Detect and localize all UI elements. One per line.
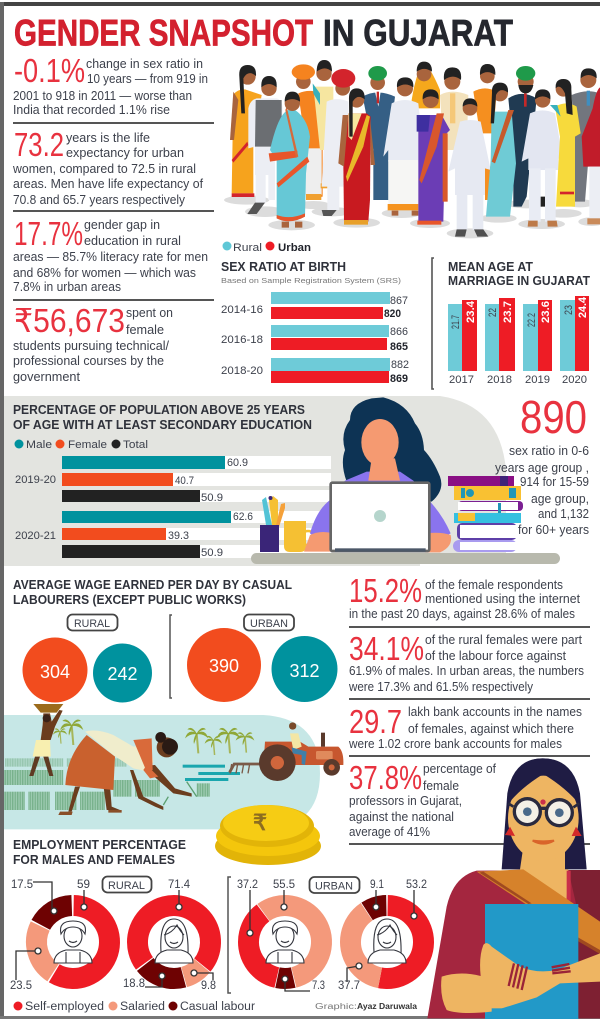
stat: bank accounts: were 1.02 crore bank accounts for males — [348, 737, 562, 751]
wage circle: rural female: 304 — [40, 662, 70, 682]
chart: sex ratio at birth: 867 — [390, 295, 408, 307]
stat: internet use: in the past 20 days, against 28.6% of males — [349, 607, 575, 621]
donut: urban male: 55.5 — [273, 879, 295, 891]
chart: mean age at marriage: 23.4 — [465, 300, 477, 323]
label: urban pill: URBAN — [250, 618, 288, 630]
chart: sex ratio at birth: SEX RATIO AT BIRTH — [221, 259, 346, 274]
label: rural pill: RURAL — [74, 618, 110, 630]
bar chart: education by year: 50.9 — [201, 492, 223, 504]
donut: rural female: 18.8 — [123, 978, 145, 990]
chart: sex ratio at birth: 869 — [390, 373, 408, 385]
donut: rural female: 71.4 — [168, 879, 191, 891]
credit: Graphic: — [315, 1002, 357, 1011]
stat: bank accounts: lakh bank accounts in the names — [408, 705, 582, 719]
wage circle: urban female: 390 — [209, 656, 239, 676]
chart: sex ratio at birth — [221, 259, 409, 385]
donut: rural male: 17.5 — [11, 879, 33, 891]
chart: mean age at marriage: 24.4 — [577, 296, 589, 318]
stat: internet use: 15.2% — [349, 572, 422, 609]
legend: rural urban — [222, 242, 311, 254]
panel: average wage — [13, 577, 338, 702]
stat: sex ratio change: 2001 to 918 in 2011 — worse than — [13, 89, 192, 103]
illustration: stack of books — [448, 476, 523, 552]
stat: education gender gap: 17.7% — [14, 215, 83, 252]
stat: bank accounts: of females, against which there — [408, 722, 574, 736]
stat: female professors: against the national — [349, 810, 454, 824]
stat: internet use — [349, 572, 581, 621]
figure: woman planting rice — [58, 731, 197, 815]
heading: secondary education — [13, 402, 312, 432]
stat: labour force: were 17.3% and 61.5% respectively — [348, 680, 534, 694]
legend: employment types: Casual labour — [180, 1001, 255, 1013]
stat: life expectancy: areas. Men have life expectancy of — [13, 177, 204, 191]
stat: female professors: professors in Gujarat, — [349, 794, 462, 808]
heading: secondary education: PERCENTAGE OF POPULATION ABOVE 25 YEARS — [13, 402, 305, 417]
stat: child sex ratio 890 — [495, 391, 589, 537]
chart: sex ratio at birth: 865 — [390, 341, 408, 353]
wage circle: urban female — [187, 628, 261, 702]
stat: female professors — [349, 759, 496, 839]
stat: education gender gap: education in rural — [84, 234, 181, 248]
legend: rural urban: Rural — [233, 242, 262, 254]
chart: mean age at marriage: 2020 — [562, 374, 587, 386]
stat: female professors: percentage of — [423, 762, 496, 776]
legend: employment types: Self-employed — [25, 1001, 104, 1013]
stat: female professors: average of 41% — [349, 825, 430, 839]
legend: male female total: Male — [26, 439, 52, 451]
chart: mean age at marriage: MEAN AGE AT — [448, 259, 533, 274]
legend: employment types — [14, 1001, 255, 1013]
stat: child sex ratio 890: 914 for 15-59 — [520, 475, 589, 489]
stat: education gender gap: and 68% for women — which was — [13, 266, 196, 280]
bar chart: education by year: 62.6 — [233, 511, 253, 523]
stat: labour force: 34.1% — [349, 630, 424, 667]
donut: urban female: 53.2 — [406, 879, 427, 891]
stat: sex ratio change: 10 years — from 919 in — [87, 72, 208, 86]
illustration: crowd of people — [224, 60, 600, 238]
stat: child sex ratio 890: years age group , — [495, 461, 589, 475]
chart: mean age at marriage: MARRIAGE IN GUJARAT — [448, 273, 590, 288]
wage circle: urban male — [272, 636, 338, 702]
stat: sex ratio change: change in sex ratio in — [86, 57, 203, 71]
donut: rural female — [123, 879, 225, 993]
chart: sex ratio at birth: 2018-20 — [221, 365, 263, 377]
chart: sex ratio at birth: 2016-18 — [221, 334, 263, 346]
stat: sex ratio change — [13, 52, 208, 117]
chart: mean age at marriage: 2017 — [449, 374, 474, 386]
stat: spending on female students: female — [126, 323, 164, 337]
stat: internet use: of the female respondents — [425, 578, 563, 592]
illustration: shelf — [251, 553, 560, 564]
chart: mean age at marriage: 23 — [563, 305, 575, 315]
title: GENDER SNAPSHOT — [14, 12, 313, 54]
stat: spending on female students: spent on — [126, 306, 173, 320]
chart: sex ratio at birth: 2014-16 — [221, 304, 263, 316]
wage circle: rural male — [93, 644, 152, 702]
stat: education gender gap: 7.8% in urban areas — [13, 280, 121, 294]
bar chart: education by year: 50.9 — [201, 547, 223, 559]
stat: education gender gap — [13, 215, 208, 294]
bar chart: education by year: 39.3 — [168, 530, 189, 542]
figure: tractor and driver — [228, 722, 343, 781]
bar chart: education by year: 40.7 — [175, 475, 194, 487]
icon: pencil cup — [260, 496, 285, 552]
stat: bank accounts — [348, 703, 582, 751]
bar chart: education by year: 60.9 — [227, 457, 248, 469]
donut: urban male: 7.3 — [312, 980, 325, 992]
stat: child sex ratio 890: sex ratio in 0-6 — [509, 444, 589, 458]
donut: urban female — [337, 879, 437, 992]
chart: mean age at marriage: 2019 — [525, 374, 550, 386]
chart: mean age at marriage — [448, 259, 590, 386]
panel: average wage: AVERAGE WAGE EARNED PER DAY BY CASUAL — [13, 577, 292, 592]
icon: rupee coins: ₹ — [253, 810, 267, 835]
wage circle: rural female — [22, 638, 88, 702]
wage circle: rural male: 242 — [107, 664, 138, 684]
label: rural pill — [68, 614, 118, 630]
label: urban pill: URBAN — [315, 880, 353, 892]
stat: spending on female students: students pursuing technical/ — [13, 339, 170, 353]
illustration: woman with laptop — [304, 397, 451, 552]
stat: life expectancy — [12, 126, 204, 207]
legend: employment types: Salaried — [120, 1001, 165, 1013]
stat: sex ratio change: -0.1% — [14, 52, 85, 89]
stat: life expectancy: years is the life — [66, 131, 150, 145]
stat: child sex ratio 890: and 1,132 — [538, 507, 589, 521]
stat: bank accounts: 29.7 — [349, 703, 402, 740]
donut: urban female: 37.7 — [338, 980, 360, 992]
stat: education gender gap: areas — 85.7% literacy rate for men — [13, 250, 208, 264]
stat: spending on female students: government — [13, 370, 81, 384]
label: urban pill — [310, 877, 360, 893]
panel: average wage: LABOURERS (EXCEPT PUBLIC WORKS) — [13, 592, 246, 607]
back row people — [292, 60, 600, 216]
wage circle: urban male: 312 — [289, 661, 320, 681]
legend: rural urban: Urban — [278, 242, 311, 254]
chart: sex ratio at birth: 866 — [390, 326, 408, 338]
chart: sex ratio at birth: 820 — [384, 308, 401, 320]
chart: sex ratio at birth: 882 — [391, 359, 409, 371]
chart: mean age at marriage: 2018 — [487, 374, 512, 386]
bar chart: education by year: 2019-20 — [15, 474, 56, 486]
icon: rupee coins — [215, 805, 321, 865]
stat: labour force: 61.9% of males. In urban areas, the numbers — [349, 664, 584, 678]
chart: mean age at marriage: 23.7 — [502, 301, 514, 323]
donut: rural male: 23.5 — [10, 980, 32, 992]
stat: labour force: of the labour force against — [425, 649, 567, 663]
front row people — [230, 65, 600, 237]
stat: child sex ratio 890: age group, — [531, 492, 589, 506]
stat: female professors: female — [423, 779, 459, 793]
marks: furrows — [183, 765, 240, 781]
stat: female professors: 37.8% — [349, 759, 422, 796]
stat: labour force — [348, 630, 584, 694]
heading: secondary education: OF AGE WITH AT LEAST SECONDARY EDUCATION — [13, 417, 312, 432]
chart: sex ratio at birth: Based on Sample Registration System (SRS) — [221, 276, 402, 285]
legend: male female total: Female — [68, 439, 107, 451]
stat: labour force: of the rural females were part — [425, 633, 583, 647]
panel: employment percentage — [10, 837, 437, 1013]
stat: education gender gap: gender gap in — [84, 218, 160, 232]
donut: rural male: 59 — [77, 879, 90, 891]
donut: rural female: 9.8 — [201, 980, 216, 992]
chart: mean age at marriage: 21.7 — [450, 315, 462, 329]
legend: male female total: Total — [123, 439, 148, 451]
stat: internet use: mentioned using the internet — [425, 592, 581, 606]
stat: child sex ratio 890: for 60+ years — [518, 523, 589, 537]
chart: mean age at marriage: 22.2 — [526, 313, 538, 327]
stat: spending on female students — [13, 302, 173, 384]
legend: male female total — [14, 439, 148, 451]
bar chart: education by year — [15, 456, 331, 559]
illustration: farm scene — [4, 704, 343, 829]
stat: spending on female students: ₹56,673 — [14, 302, 125, 339]
chart: mean age at marriage: 22 — [487, 308, 499, 317]
stat: child sex ratio 890: 890 — [520, 391, 587, 443]
donut: urban male — [234, 879, 336, 993]
label: urban pill — [244, 614, 294, 630]
donut: rural male — [10, 879, 123, 992]
donut: urban female: 9.1 — [370, 879, 384, 891]
label: rural pill: RURAL — [108, 880, 145, 892]
illustration: teacher holding book — [427, 758, 600, 1019]
figure: woman carrying basket — [29, 704, 63, 776]
stat: sex ratio change: India that recorded 1.1% rise — [13, 103, 170, 117]
stat: life expectancy: expectancy for urban — [66, 146, 184, 160]
stat: life expectancy: 70.8 and 65.7 years respectively — [13, 193, 186, 207]
icon: mug — [284, 521, 315, 552]
label: rural pill — [102, 876, 152, 892]
bar chart: education by year: 2020-21 — [15, 530, 56, 542]
title: IN GUJARAT — [323, 12, 513, 54]
chart: mean age at marriage: 23.6 — [540, 301, 552, 323]
donut: urban male: 37.2 — [237, 879, 258, 891]
panel: employment percentage: FOR MALES AND FEMALES — [13, 852, 175, 867]
stat: life expectancy: 73.2 — [14, 126, 64, 163]
stat: life expectancy: women, compared to 72.5 in rural — [12, 162, 196, 176]
stat: spending on female students: professional courses by the — [13, 354, 164, 368]
credit — [315, 1002, 418, 1011]
credit: Ayaz Daruwala — [357, 1002, 418, 1011]
panel: employment percentage: EMPLOYMENT PERCENTAGE — [13, 837, 186, 852]
panel: secondary education — [4, 396, 560, 567]
